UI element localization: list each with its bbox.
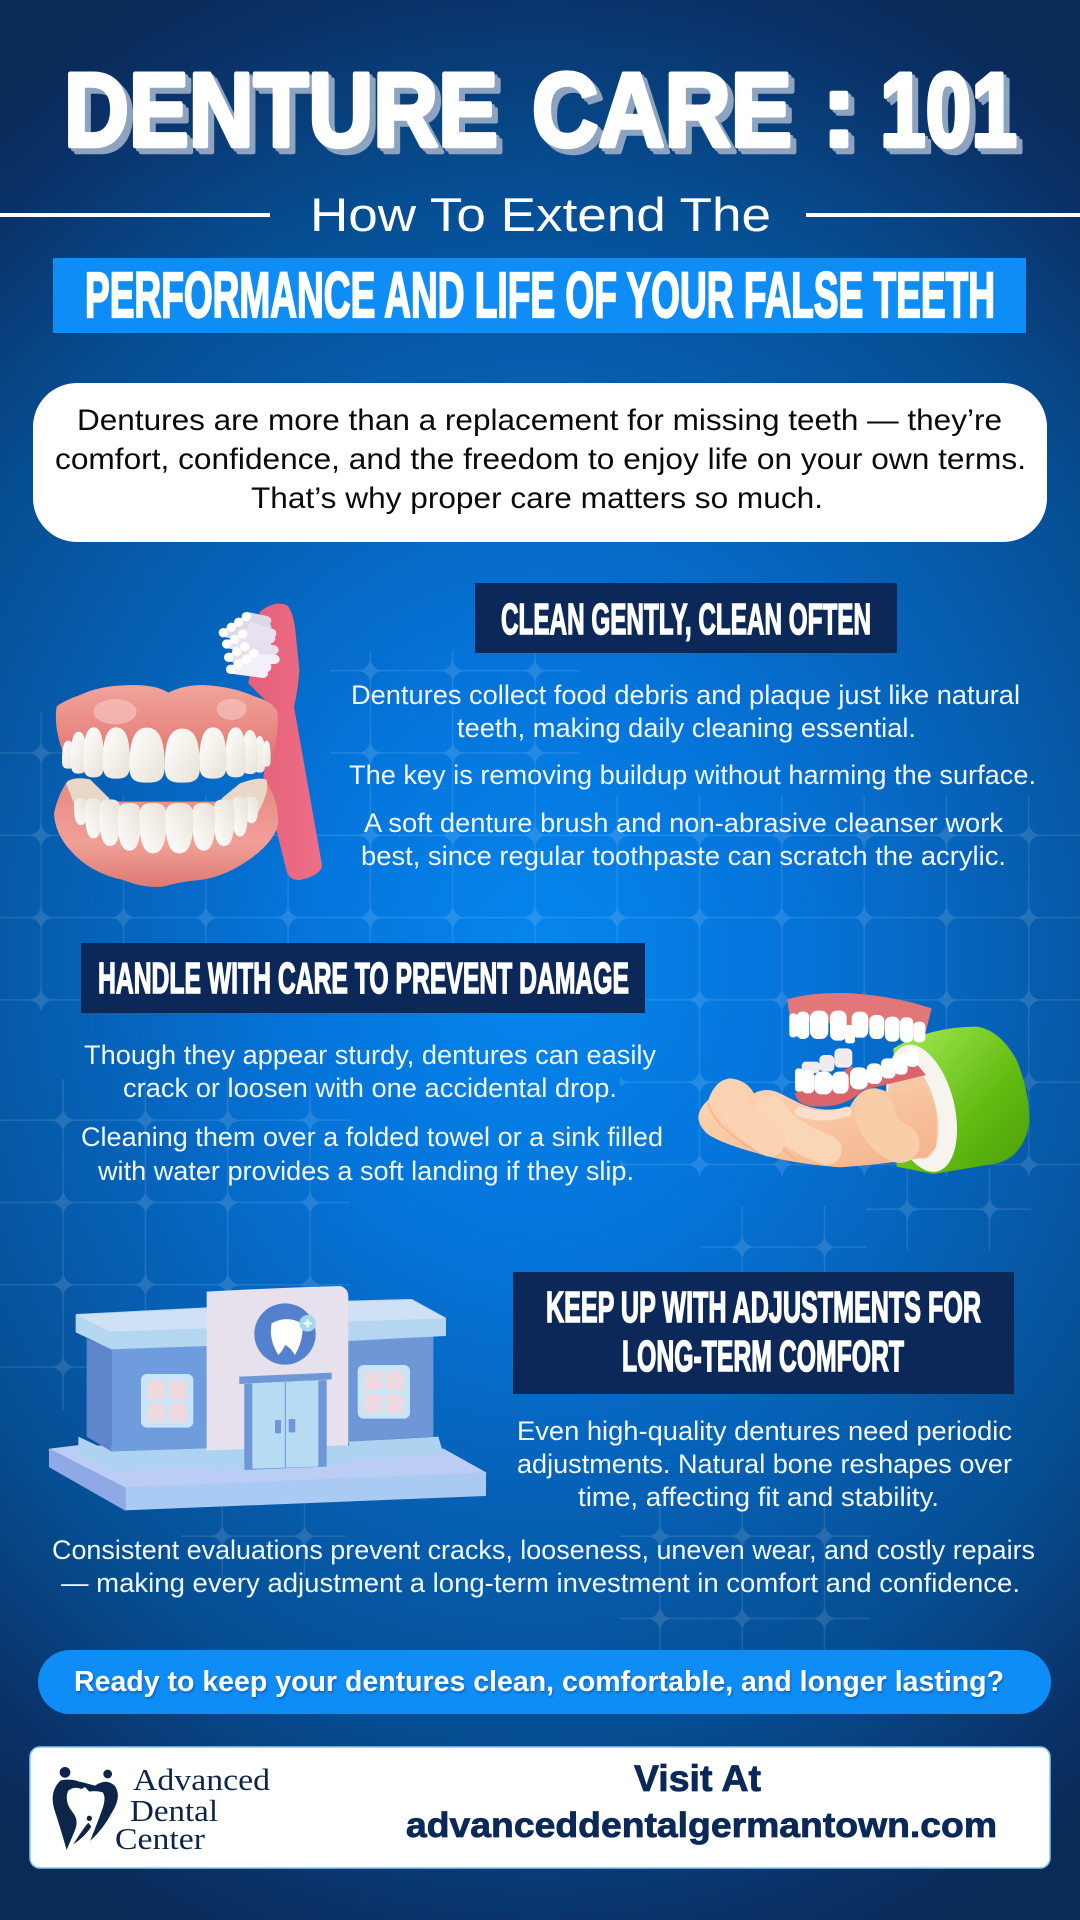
title: DENTURE bbox=[64, 52, 498, 169]
body text: keep up with adjustments: time, affecting fit and stability. bbox=[578, 1482, 939, 1512]
subtitle with rules: How To Extend The bbox=[310, 188, 771, 241]
title: CARE bbox=[532, 52, 792, 169]
footer panel bbox=[30, 1747, 1050, 1868]
body text: keep up with adjustments: Even high-quality dentures need periodic bbox=[517, 1416, 1012, 1446]
subtitle with rules bbox=[0, 188, 1080, 241]
panel: handle with care bbox=[81, 943, 1029, 1186]
title: : bbox=[822, 52, 856, 169]
body text: handle with care bbox=[81, 1040, 663, 1186]
logo: advanced dental center: Advanced bbox=[133, 1762, 271, 1797]
call to action bar bbox=[38, 1650, 1051, 1714]
icon: dental clinic building bbox=[50, 1286, 485, 1509]
logo: advanced dental center: Center bbox=[115, 1821, 206, 1856]
body text: keep up with adjustments bbox=[52, 1416, 1035, 1598]
panel: keep up with adjustments bbox=[50, 1272, 1035, 1598]
intro text panel bbox=[33, 383, 1047, 542]
body text: clean gently: Dentures collect food debris and plaque just like natural bbox=[351, 680, 1020, 710]
icon: dentures with toothbrush bbox=[54, 604, 322, 887]
body text: clean gently bbox=[349, 680, 1036, 871]
title: 101 bbox=[880, 52, 1017, 169]
title bbox=[64, 52, 1017, 169]
body text: handle with care: Though they appear sturdy, dentures can easily bbox=[84, 1040, 656, 1070]
logo: advanced dental center: Dental bbox=[130, 1793, 218, 1828]
heading: clean gently bbox=[475, 583, 897, 653]
body text: keep up with adjustments: — making every adjustment a long-term investment in comfort and confidence. bbox=[61, 1568, 1020, 1598]
intro text panel: That’s why proper care matters so much. bbox=[251, 482, 823, 515]
body text: clean gently: The key is removing buildup without harming the surface. bbox=[349, 760, 1036, 790]
logo: advanced dental center bbox=[53, 1762, 271, 1856]
body text: keep up with adjustments: adjustments. Natural bone reshapes over bbox=[517, 1449, 1012, 1479]
body text: handle with care: with water provides a soft landing if they slip. bbox=[97, 1156, 634, 1186]
intro text panel: Dentures are more than a replacement for missing teeth — they’re bbox=[77, 404, 1002, 437]
website call out bbox=[406, 1758, 997, 1845]
heading: keep up with adjustments bbox=[513, 1272, 1014, 1394]
heading: handle with care: HANDLE WITH CARE TO PREVENT DAMAGE bbox=[98, 954, 629, 1003]
body text: keep up with adjustments: Consistent evaluations prevent cracks, looseness, uneven wear, and costly repairs bbox=[52, 1535, 1035, 1565]
website call out: advanceddentalgermantown.com bbox=[406, 1806, 997, 1845]
panel: clean gently bbox=[54, 583, 1036, 887]
body text: clean gently: best, since regular toothpaste can scratch the acrylic. bbox=[361, 841, 1006, 871]
icon: hand holding dentures bbox=[698, 993, 1029, 1179]
body text: clean gently: teeth, making daily cleaning essential. bbox=[457, 713, 916, 743]
body text: clean gently: A soft denture brush and non-abrasive cleanser work bbox=[364, 808, 1003, 838]
call to action bar: Ready to keep your dentures clean, comfortable, and longer lasting? bbox=[74, 1666, 1004, 1698]
intro text panel: comfort, confidence, and the freedom to enjoy life on your own terms. bbox=[55, 443, 1026, 476]
website call out: Visit At bbox=[634, 1758, 761, 1799]
heading: handle with care bbox=[81, 943, 645, 1013]
body text: handle with care: crack or loosen with one accidental drop. bbox=[123, 1073, 617, 1103]
body text: handle with care: Cleaning them over a folded towel or a sink filled bbox=[81, 1122, 663, 1152]
